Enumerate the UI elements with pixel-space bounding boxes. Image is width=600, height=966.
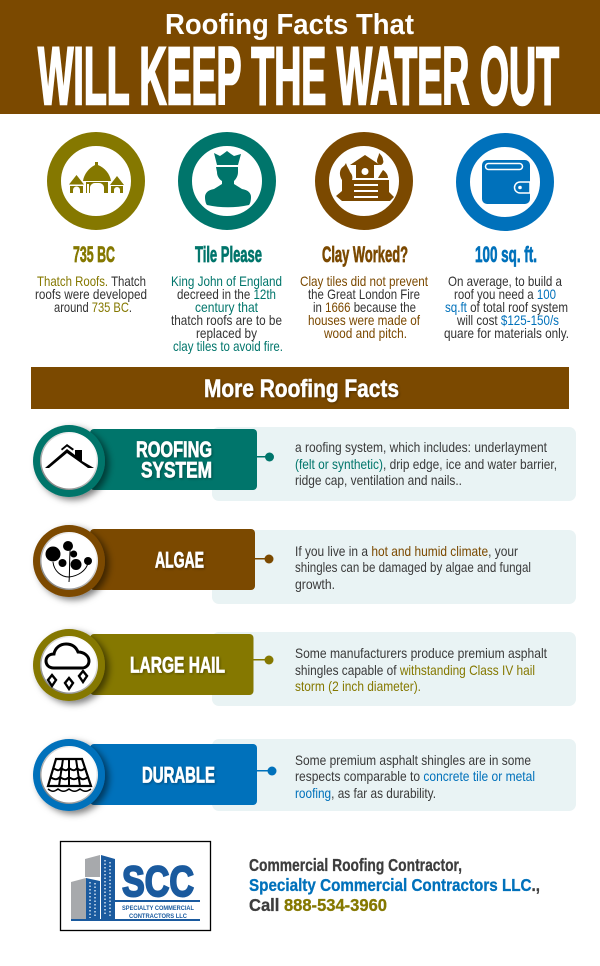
text block bbox=[35, 273, 147, 315]
text block bbox=[300, 273, 428, 341]
section banner: More Roofing Facts: More Roofing Facts bbox=[204, 375, 399, 403]
description: growth. bbox=[295, 577, 335, 592]
text block: will cost $125-150/s bbox=[456, 312, 559, 328]
title line one: Roofing Facts That bbox=[165, 9, 414, 41]
text block: around 735 BC. bbox=[54, 299, 132, 315]
text block: clay tiles to avoid fire. bbox=[173, 338, 283, 354]
logo tagline bbox=[122, 906, 194, 920]
text block: houses were made of bbox=[308, 312, 420, 328]
section banner: More Roofing Facts bbox=[31, 367, 569, 409]
header banner bbox=[0, 0, 600, 122]
label: LARGE HAIL bbox=[130, 652, 225, 678]
text block: quare for materials only. bbox=[444, 325, 569, 341]
description: (felt or synthetic), drip edge, ice and water barrier, bbox=[295, 457, 557, 472]
text block: Thatch Roofs. Thatch bbox=[37, 273, 146, 289]
description bbox=[295, 544, 531, 592]
icon: buildings bbox=[71, 855, 115, 921]
panel: Clay Worked? bbox=[300, 139, 428, 341]
panel: roofing system bbox=[33, 425, 576, 501]
text block: sq.ft of total roof system bbox=[445, 299, 568, 315]
text block: replaced by bbox=[196, 325, 257, 341]
text block: wood and pitch. bbox=[323, 325, 407, 341]
label: ROOFING bbox=[136, 437, 212, 462]
contact text: Commercial Roofing Contractor, bbox=[249, 855, 462, 875]
panel: large hail bbox=[33, 629, 576, 706]
connector bbox=[257, 452, 274, 462]
panel: durable bbox=[33, 739, 576, 811]
label: DURABLE bbox=[142, 762, 215, 788]
description bbox=[295, 753, 535, 801]
icon: king bbox=[185, 139, 269, 223]
icon: wallet bbox=[463, 140, 547, 224]
logo tagline: CONTRACTORS LLC bbox=[129, 914, 188, 920]
description: a roofing system, which includes: underlayment bbox=[295, 440, 547, 455]
description bbox=[295, 440, 557, 488]
panel: 100 sq. ft. bbox=[444, 140, 569, 341]
logo: SCC bbox=[60, 842, 210, 930]
description: shingles can be damaged by algae and fungal bbox=[295, 560, 531, 575]
text block: Clay tiles did not prevent bbox=[300, 273, 428, 289]
heading: 100 sq. ft.: 100 sq. ft. bbox=[475, 242, 537, 267]
text block: decreed in the 12th bbox=[177, 286, 276, 302]
text block: roof you need a 100 bbox=[454, 286, 556, 302]
description: If you live in a hot and humid climate, your bbox=[295, 544, 518, 559]
icon: burning house bbox=[322, 139, 406, 223]
text block: the Great London Fire bbox=[308, 286, 420, 302]
label bbox=[136, 437, 212, 482]
connector bbox=[253, 656, 274, 664]
panel: Tile Please bbox=[171, 139, 283, 354]
text block: King John of England bbox=[171, 273, 282, 289]
text block: roofs were developed bbox=[35, 286, 147, 302]
text block: in 1666 because the bbox=[313, 299, 416, 315]
connector bbox=[255, 554, 274, 564]
description: Some manufacturers produce premium asphalt bbox=[295, 646, 547, 661]
label: SYSTEM bbox=[141, 458, 212, 482]
description: ridge cap, ventilation and nails.. bbox=[295, 473, 462, 488]
logo wordmark: SCC bbox=[122, 858, 194, 906]
text block: On average, to build a bbox=[448, 273, 562, 289]
icon: hail cloud bbox=[33, 629, 105, 701]
panel: algae bbox=[33, 525, 576, 604]
heading: 735 BC: 735 BC bbox=[73, 242, 115, 267]
icon: thatch huts bbox=[54, 139, 138, 223]
panel: 735 BC bbox=[35, 139, 147, 315]
text block bbox=[444, 273, 569, 341]
text block: thatch roofs are to be bbox=[171, 312, 282, 328]
description: roofing, as far as durability. bbox=[295, 786, 436, 801]
description: storm (2 inch diameter). bbox=[295, 679, 421, 694]
connector bbox=[257, 766, 276, 776]
description: Some premium asphalt shingles are in some bbox=[295, 753, 531, 768]
contact text bbox=[249, 855, 540, 915]
icon: tile roof bbox=[33, 739, 105, 811]
contact text: Call 888-534-3960 bbox=[249, 895, 387, 915]
heading: Clay Worked?: Clay Worked? bbox=[322, 242, 408, 267]
text block: century that bbox=[195, 299, 258, 315]
contact text: Specialty Commercial Contractors LLC., bbox=[249, 875, 540, 895]
description: shingles capable of withstanding Class IV hail bbox=[295, 663, 535, 678]
heading: Tile Please: Tile Please bbox=[195, 242, 262, 267]
description: respects comparable to concrete tile or metal bbox=[295, 769, 535, 784]
icon: roof bbox=[33, 425, 105, 497]
icon: algae tree bbox=[33, 525, 105, 597]
logo tagline: SPECIALTY COMMERCIAL bbox=[122, 906, 194, 912]
text block bbox=[171, 273, 283, 354]
description bbox=[295, 646, 547, 694]
label: ALGAE bbox=[155, 548, 204, 572]
